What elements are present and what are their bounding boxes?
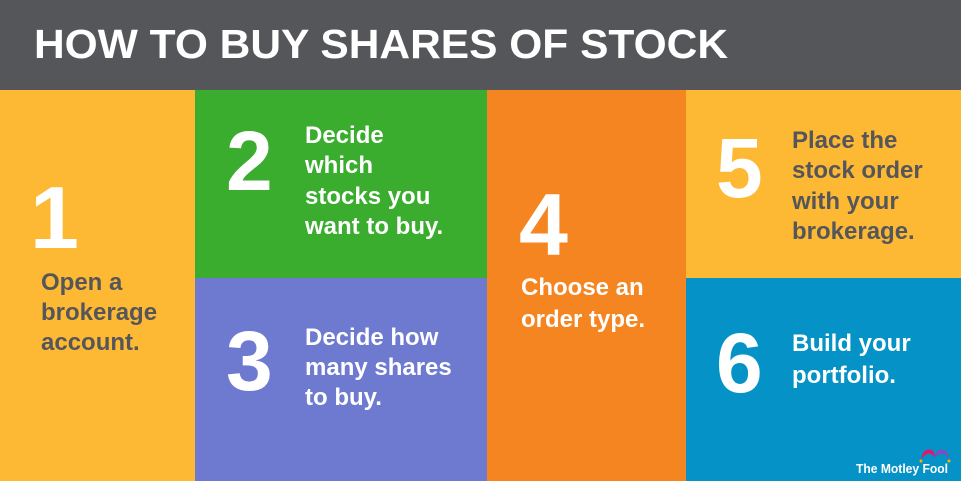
text: step 2: Decide	[305, 122, 384, 149]
icon: jester hat	[920, 449, 950, 462]
panel: step 1	[0, 90, 195, 481]
panel: step 6	[686, 278, 961, 481]
logo: The Motley Fool	[856, 449, 950, 476]
number 6: 6	[716, 316, 763, 410]
number 5: 5	[716, 121, 763, 215]
panel: step 4	[487, 90, 686, 481]
text: step 4: Choose an	[521, 274, 644, 301]
text: step 5: brokerage.	[792, 218, 915, 245]
text: step 3: many shares	[305, 354, 452, 381]
text: step 1: brokerage	[41, 299, 157, 326]
panel: step 3	[195, 278, 487, 481]
logo: The Motley Fool: The Motley Fool	[856, 461, 948, 476]
text: step 5: with your	[791, 188, 899, 215]
panel: step 5	[686, 90, 961, 278]
text: step 1: account.	[41, 329, 140, 356]
text: step 3: Decide how	[305, 324, 439, 351]
text: step 6: portfolio.	[792, 362, 896, 389]
text: step 6: Build your	[792, 330, 911, 357]
text: step 4: order type.	[521, 306, 645, 333]
number 2: 2	[226, 114, 273, 208]
text: step 5: stock order	[792, 157, 923, 184]
number 4: 4	[519, 175, 568, 274]
text: step 2: which	[304, 152, 373, 179]
text: step 5: Place the	[792, 127, 897, 154]
panel: step 2	[195, 90, 487, 278]
text: step 1: Open a	[41, 269, 123, 296]
number 3: 3	[226, 314, 273, 408]
number 1: 1	[30, 168, 79, 267]
text: step 2: want to buy.	[304, 213, 443, 240]
text: step 3: to buy.	[305, 384, 382, 411]
header	[0, 0, 961, 90]
text: step 2: stocks you	[305, 183, 430, 210]
title: HOW TO BUY SHARES OF STOCK	[34, 21, 728, 67]
